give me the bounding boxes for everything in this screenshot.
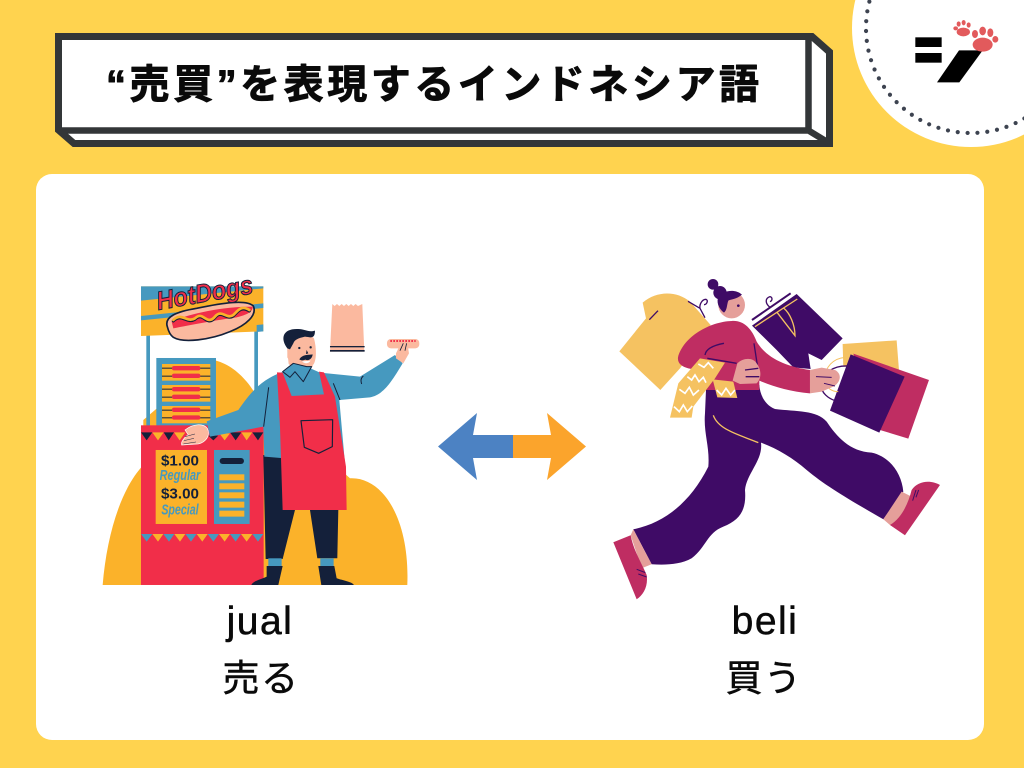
menu board behind stall <box>156 358 216 428</box>
raised hand <box>396 343 409 363</box>
shirt <box>207 355 403 463</box>
price board <box>156 450 207 524</box>
paw prints <box>953 20 998 52</box>
stall counter: $3.00 <box>161 486 199 503</box>
yellow shirt on hanger <box>619 294 711 390</box>
arrow: double headed <box>438 413 586 480</box>
front hand <box>810 368 840 393</box>
hand on counter <box>182 425 208 445</box>
hand on waist <box>733 359 760 384</box>
sign lettering: HotDogs <box>154 269 255 316</box>
stall counter: $1.00 <box>161 453 199 470</box>
scarf <box>670 358 737 418</box>
hot dog on sign <box>167 302 254 340</box>
stall counter <box>141 425 264 585</box>
neck and head <box>287 350 315 373</box>
vendor figure <box>182 329 409 585</box>
label: 売る: 売る <box>222 658 300 699</box>
stall counter: Regular <box>160 468 201 484</box>
hot dog in hand <box>387 339 419 351</box>
lower bunting <box>141 534 263 542</box>
illustration: running shopper <box>613 279 940 599</box>
shoes <box>613 535 647 599</box>
sign <box>141 269 263 340</box>
label: jual: jual <box>226 600 293 643</box>
logo mark <box>915 20 998 82</box>
top bunting <box>141 432 263 440</box>
yellow background hills <box>103 360 407 585</box>
shopping bag <box>821 354 929 439</box>
apron pocket <box>301 420 333 453</box>
socks <box>268 558 282 567</box>
stand poles <box>146 330 258 427</box>
main white panel <box>36 174 984 740</box>
blue side panel <box>214 450 250 524</box>
apron <box>277 372 347 510</box>
dark shorts on hanger <box>752 293 843 369</box>
paper bag <box>330 304 365 352</box>
collar <box>283 363 312 382</box>
label: 買う: 買う <box>726 658 802 699</box>
hair bun and head <box>708 279 745 318</box>
trousers <box>263 455 340 559</box>
logo badge <box>852 0 1024 147</box>
label: beli: beli <box>732 600 798 643</box>
trousers <box>633 385 903 565</box>
stall counter: Special <box>161 502 199 518</box>
illustration: hot dog vendor <box>103 269 419 585</box>
title box <box>58 36 830 144</box>
back yellow bag <box>843 340 899 370</box>
shoes <box>251 566 283 585</box>
ankles <box>631 529 652 568</box>
title text: “売買”を表現するインドネシア語 <box>106 63 759 107</box>
torso and arm <box>678 321 810 393</box>
dotted ring <box>866 0 1024 133</box>
shirt creases <box>264 376 363 427</box>
